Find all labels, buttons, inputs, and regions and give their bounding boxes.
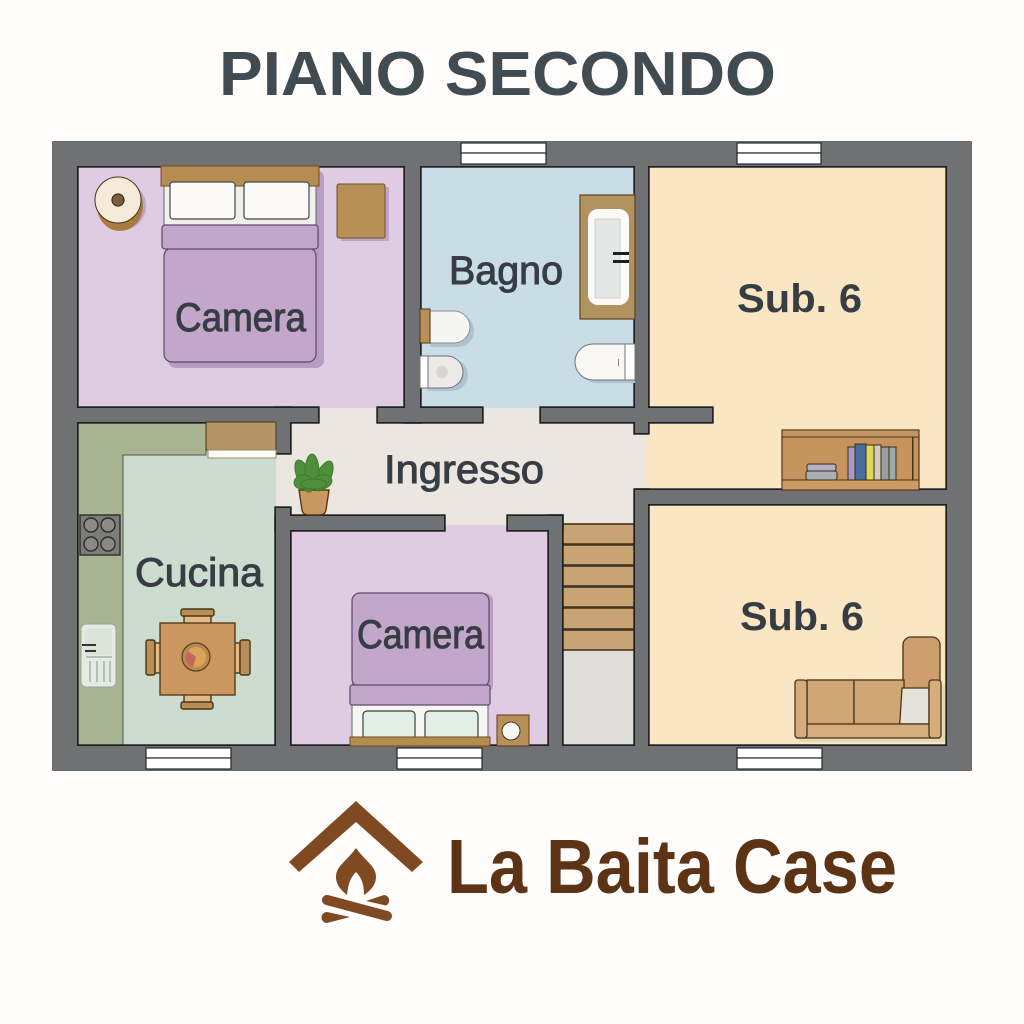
room floor: cucina (77, 422, 276, 746)
room floor: bagno (420, 166, 635, 408)
logo wordmark: La Baita Case (447, 824, 897, 910)
flame (336, 848, 376, 895)
furniture: round stool (95, 177, 146, 231)
room floor: sub 6 upper (645, 166, 947, 490)
furniture: sofa (795, 637, 945, 742)
furniture: bathtub (580, 195, 635, 319)
walls (53, 142, 971, 770)
label: ingresso: Ingresso (384, 448, 544, 492)
label: camera lower: Camera (357, 613, 485, 657)
label: bagno: Bagno (449, 249, 563, 293)
floor plan (53, 142, 971, 770)
furniture: sink (575, 344, 635, 383)
furniture: bidet (420, 309, 474, 347)
furniture: nightstand lower (497, 715, 529, 746)
furniture: bookshelf (782, 430, 919, 490)
staircase (562, 524, 635, 650)
furniture: nightstand upper (337, 184, 389, 241)
title: PIANO SECONDO (219, 40, 776, 109)
stair landing (562, 650, 635, 746)
kitchen counter (77, 422, 206, 746)
left log end (322, 912, 350, 923)
furniture: double bed upper (161, 166, 324, 368)
roof (289, 801, 423, 872)
room floor: camera upper (77, 166, 405, 408)
furniture: double bed lower (350, 593, 493, 746)
furniture: dining table (146, 609, 250, 709)
label: sub 6 lower: Sub. 6 (740, 595, 864, 639)
label: cucina: Cucina (135, 551, 264, 595)
label: camera upper: Camera (175, 296, 307, 340)
room floor: ingresso (276, 408, 645, 525)
furniture: wall cabinet (206, 422, 276, 458)
label: sub 6 upper: Sub. 6 (737, 277, 862, 321)
main log (327, 900, 387, 916)
room floor: sub 6 lower (648, 504, 947, 746)
logo icon (289, 801, 423, 923)
furniture: toilet (420, 356, 468, 391)
furniture: stove (80, 515, 120, 555)
room floor: camera lower (290, 525, 549, 746)
windows (146, 143, 822, 769)
right log end (366, 895, 389, 906)
plant (291, 454, 337, 515)
furniture: kitchen sink (81, 624, 116, 687)
